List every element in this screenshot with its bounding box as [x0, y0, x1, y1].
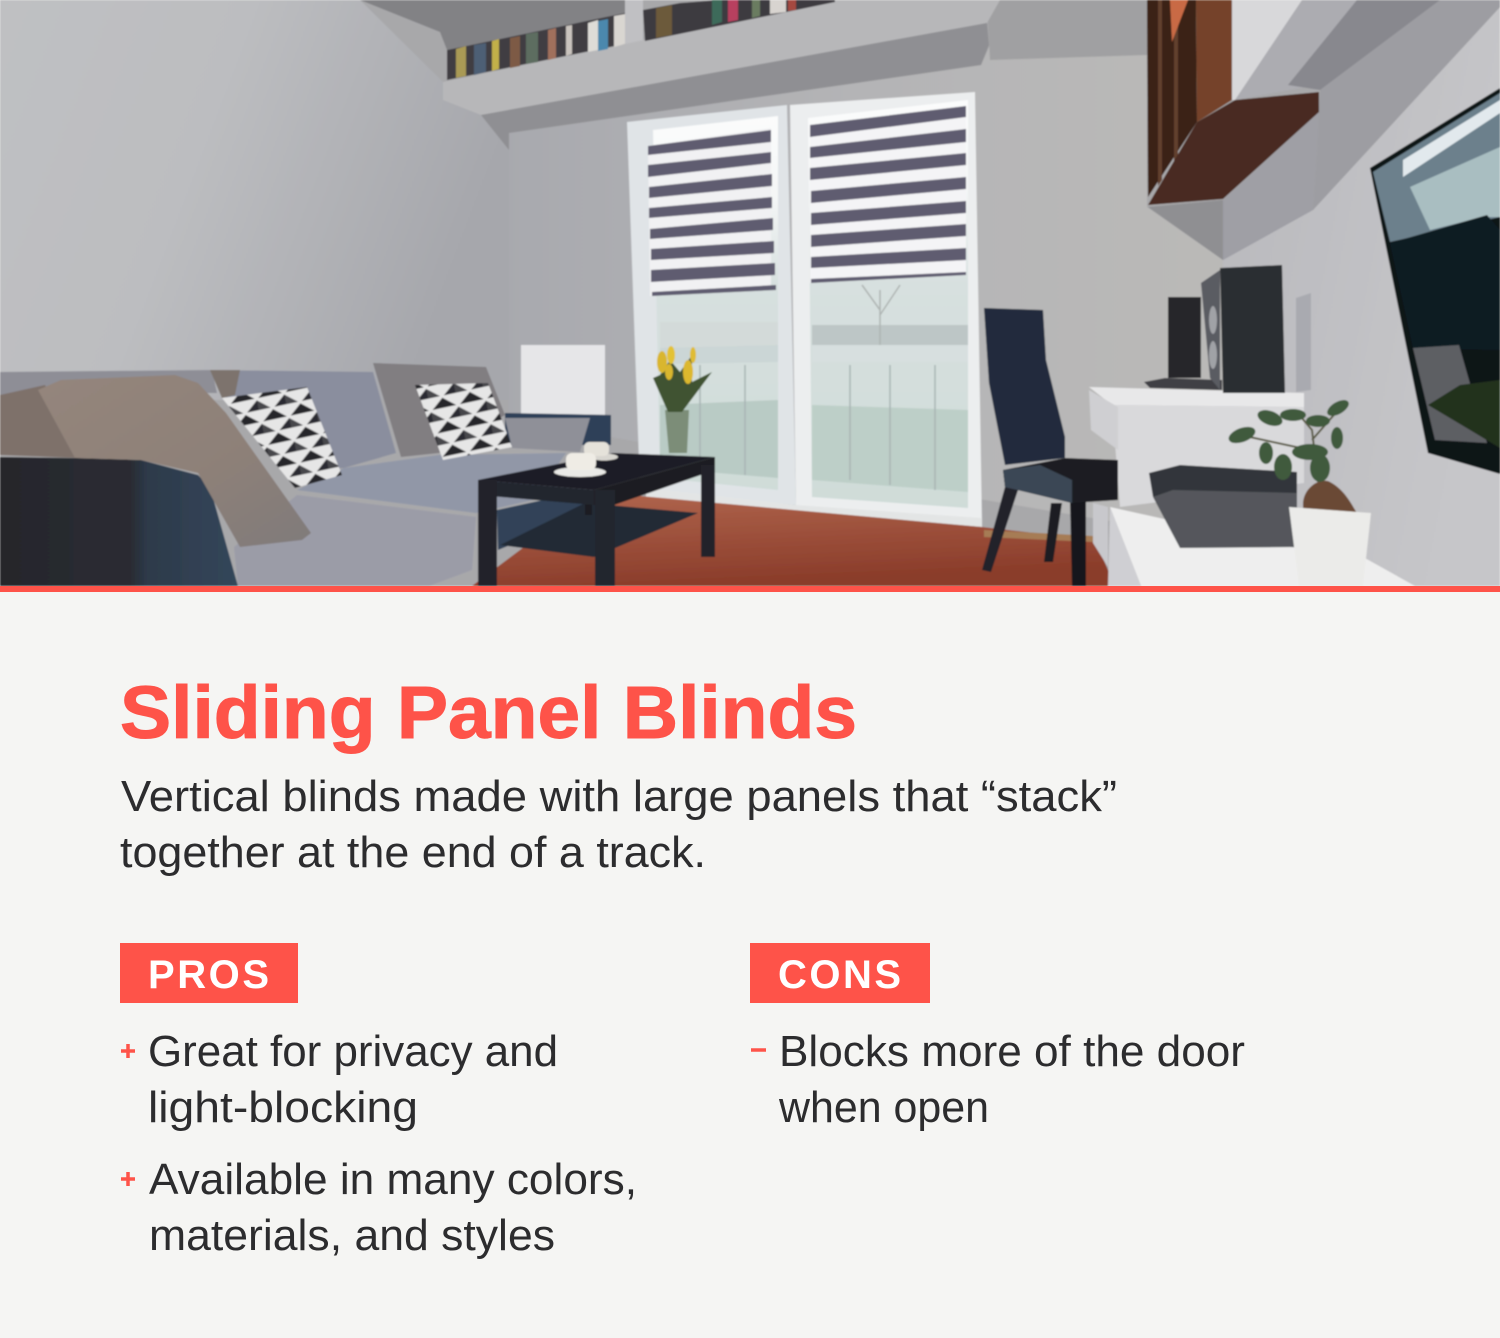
radiator	[521, 345, 605, 415]
pro item 1: light-blocking	[148, 1083, 418, 1132]
desk with speakers	[1089, 265, 1311, 567]
far armrest	[505, 413, 611, 445]
left back brown cushion	[0, 385, 80, 458]
patterned cushions	[222, 383, 512, 488]
cons list	[751, 1027, 1245, 1132]
title: Sliding Panel Blinds	[120, 671, 857, 754]
blinds right panel	[810, 106, 966, 283]
blinds left panel	[648, 128, 776, 296]
description: together at the end of a track.	[120, 828, 706, 877]
right back cushion	[373, 363, 505, 457]
coffee table with cups	[478, 442, 715, 586]
description: Vertical blinds made with large panels that “stack”	[121, 772, 1117, 821]
floating bookshelf with books	[443, 0, 1000, 150]
side unit with printer	[1108, 465, 1415, 586]
room walls and ceiling	[0, 0, 1500, 586]
books right group	[643, 0, 835, 41]
wall-mounted television	[1370, 88, 1500, 474]
pros list	[121, 1027, 637, 1260]
con item 1: Blocks more of the door	[779, 1027, 1245, 1076]
large brown cushion	[38, 375, 311, 547]
sofa back left	[0, 370, 217, 395]
pro item 2: materials, and styles	[149, 1211, 555, 1260]
photo: living room with sliding panel blinds	[0, 0, 1500, 586]
wall cabinet and ceiling beam	[1147, 0, 1500, 260]
cons badge: CONS	[778, 953, 901, 997]
window and balcony door	[627, 92, 982, 527]
coral divider below photo	[0, 586, 1500, 592]
sofa	[0, 363, 620, 586]
con item 1: when open	[778, 1083, 989, 1132]
pros badge: PROS	[148, 953, 269, 997]
seats	[297, 453, 566, 513]
floor	[472, 496, 1115, 586]
pro item 2	[121, 1155, 637, 1260]
con item 1	[751, 1027, 1245, 1132]
dark armrest	[0, 457, 238, 586]
view outside: buildings and railing	[660, 285, 968, 492]
sofa base behind table	[496, 499, 584, 550]
books left group	[447, 13, 625, 80]
potted plant	[1228, 399, 1372, 558]
pro item 2: Available in many colors,	[149, 1155, 637, 1204]
pro item 1	[121, 1027, 558, 1132]
middle back cushion	[226, 370, 396, 468]
flower vase	[653, 346, 712, 453]
dark dining chair	[982, 308, 1118, 586]
cons badge	[750, 943, 930, 1003]
description	[120, 772, 1117, 877]
panel behind speakers	[1296, 293, 1311, 392]
pros badge	[120, 943, 298, 1003]
pro item 1: Great for privacy and	[148, 1027, 558, 1076]
